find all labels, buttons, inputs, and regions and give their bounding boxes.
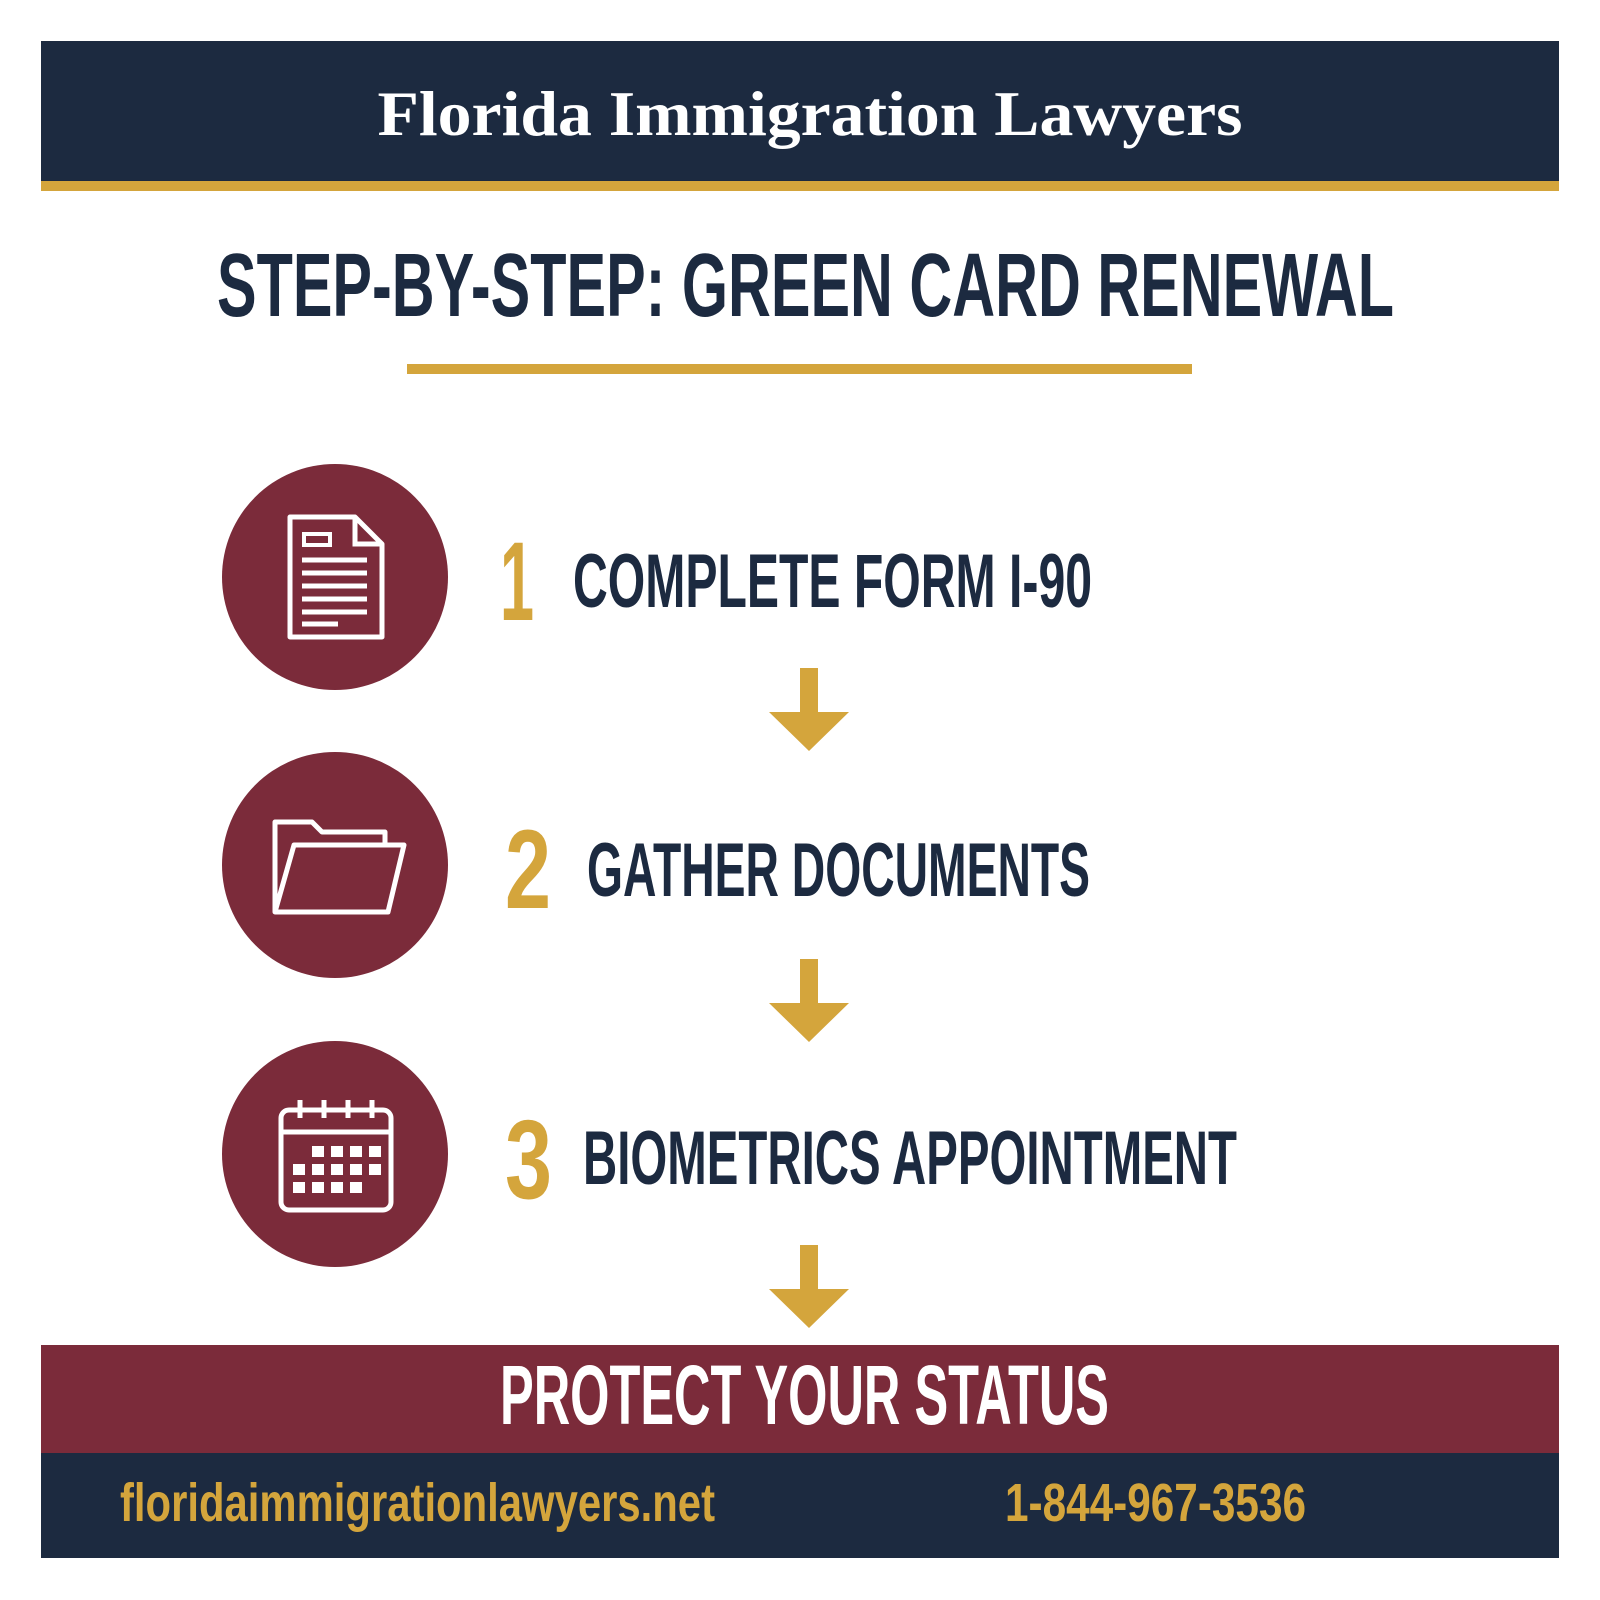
- step 3: [222, 1041, 1237, 1267]
- banner: protect your status: [41, 1345, 1559, 1453]
- arrow 3: [769, 1245, 849, 1328]
- icon: calendar: [222, 1041, 448, 1267]
- step 1: [222, 464, 1092, 690]
- step 1 label: COMPLETE FORM I-90: [573, 539, 1092, 624]
- number 1: 1: [500, 519, 534, 644]
- number 3: 3: [505, 1097, 552, 1222]
- title underline: [407, 364, 1192, 374]
- icon: document: [222, 464, 448, 690]
- header title: Florida Immigration Lawyers: [378, 78, 1242, 149]
- footer: contact: [41, 1453, 1559, 1558]
- step 2 label: GATHER DOCUMENTS: [587, 828, 1090, 913]
- phone: 1-844-967-3536: [1005, 1473, 1306, 1533]
- arrow 2: [769, 959, 849, 1042]
- icon: folder: [222, 752, 448, 978]
- arrow 1: [769, 668, 849, 751]
- number 2: 2: [505, 807, 551, 932]
- website: floridaimmigrationlawyers.net: [120, 1473, 715, 1533]
- banner: protect your status: PROTECT YOUR STATUS: [500, 1348, 1109, 1442]
- step 2: [222, 752, 1090, 978]
- header bar: [41, 41, 1559, 191]
